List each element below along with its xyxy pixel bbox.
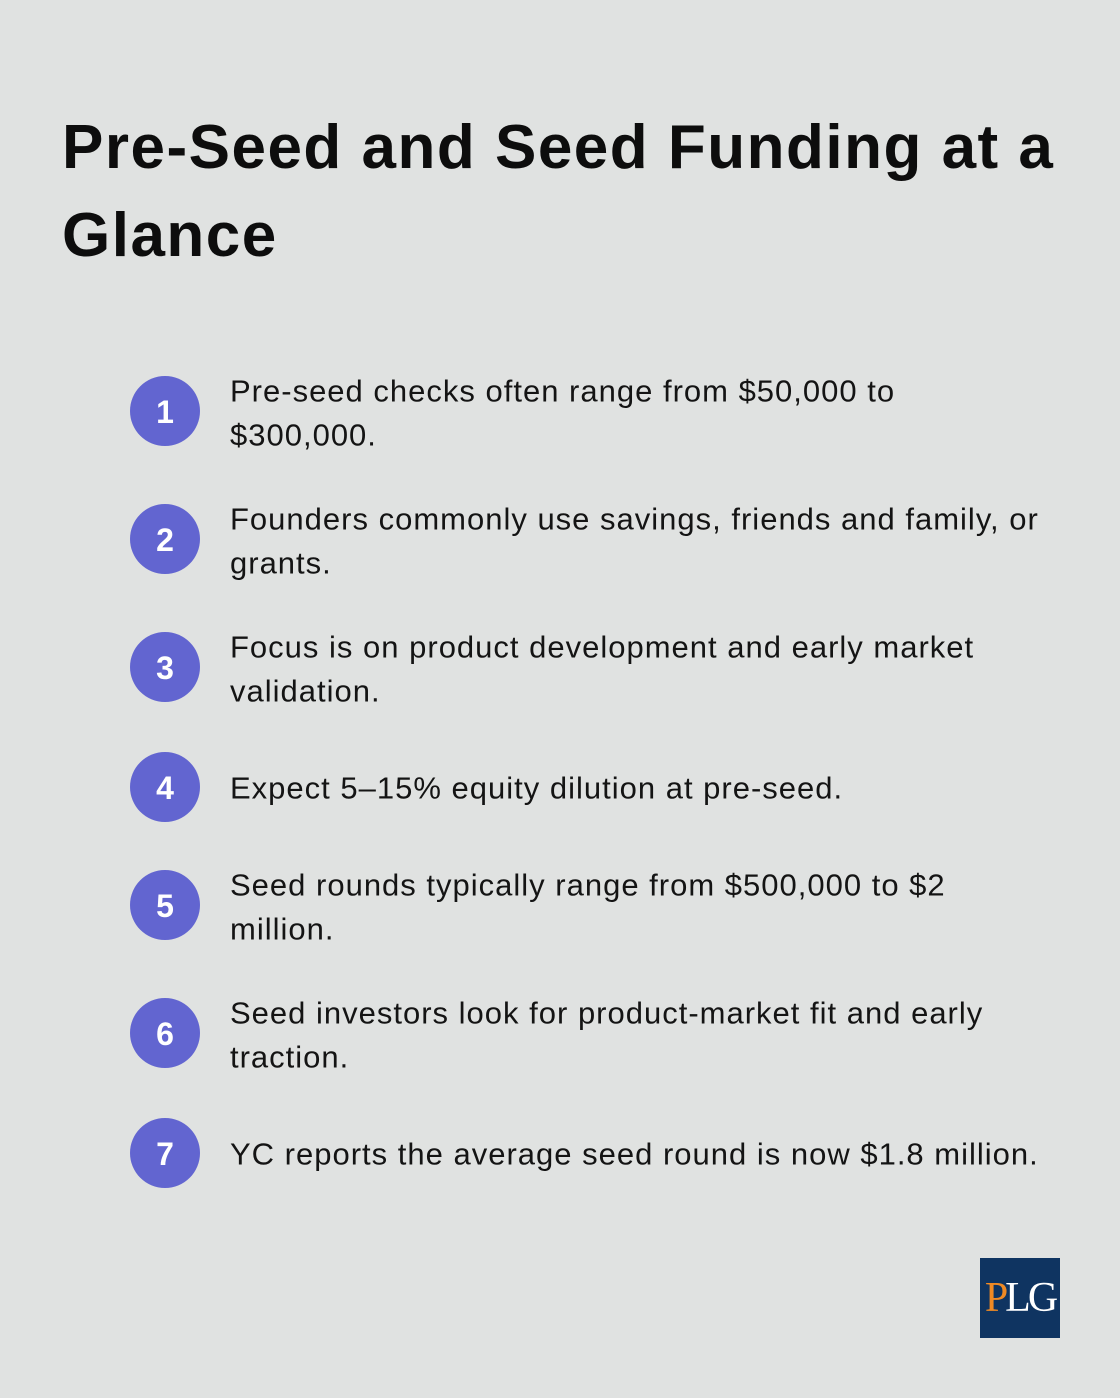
item 3: validation.: [230, 674, 381, 709]
item 1: Pre-seed checks often range from $50,000 to: [230, 374, 895, 409]
item 4: Expect 5–15% equity dilution at pre-seed.: [230, 770, 843, 805]
item 4: [130, 752, 843, 822]
item 7: 7: [156, 1136, 174, 1172]
item 6: traction.: [230, 1040, 349, 1075]
item 5: million.: [230, 912, 334, 947]
item 7: YC reports the average seed round is now $1.8 million.: [230, 1136, 1039, 1171]
title: Glance: [62, 201, 278, 270]
item 2: [130, 502, 1039, 581]
item 3: 3: [156, 650, 174, 686]
item 7: [130, 1118, 1039, 1188]
item 5: [130, 868, 946, 947]
item 1: $300,000.: [230, 418, 377, 453]
logo: PLG: PLG: [985, 1275, 1055, 1321]
item 3: [130, 630, 974, 709]
item 1: [130, 374, 895, 453]
item 2: 2: [156, 522, 174, 558]
item 4: 4: [156, 770, 174, 806]
item 2: grants.: [230, 546, 332, 581]
title: [62, 113, 1054, 270]
item 6: [130, 996, 983, 1075]
item 5: Seed rounds typically range from $500,000 to $2: [230, 868, 946, 903]
item 6: Seed investors look for product-market fit and early: [230, 996, 983, 1031]
item 6: 6: [156, 1016, 174, 1052]
title: Pre-Seed and Seed Funding at a: [62, 113, 1054, 182]
item 5: 5: [156, 888, 174, 924]
logo: PLG: [980, 1258, 1060, 1338]
item 3: Focus is on product development and early market: [230, 630, 974, 665]
item 2: Founders commonly use savings, friends and family, or: [230, 502, 1039, 537]
item 1: 1: [156, 394, 174, 430]
